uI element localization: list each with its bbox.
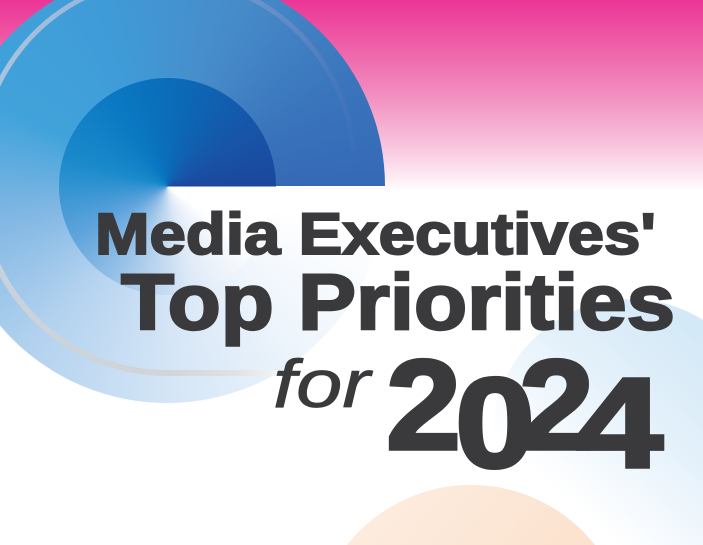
year 2024: 0 — [455, 352, 535, 495]
heading line 2: Top Priorities — [121, 257, 675, 346]
year 2024: 2 — [519, 334, 594, 477]
year 2024 — [386, 334, 663, 495]
pale blue circle — [492, 299, 703, 545]
heading line 1: Media Executives' — [95, 202, 656, 267]
pink gradient band — [0, 0, 703, 192]
heading word: for: for — [273, 346, 373, 422]
peach circle — [347, 485, 595, 545]
year 2024: 4 — [576, 352, 663, 495]
year 2024: 2 — [386, 334, 461, 477]
inner dark blue conic circle — [59, 78, 276, 295]
ring: upper arc — [0, 0, 354, 186]
ring: lower arc — [0, 186, 278, 373]
